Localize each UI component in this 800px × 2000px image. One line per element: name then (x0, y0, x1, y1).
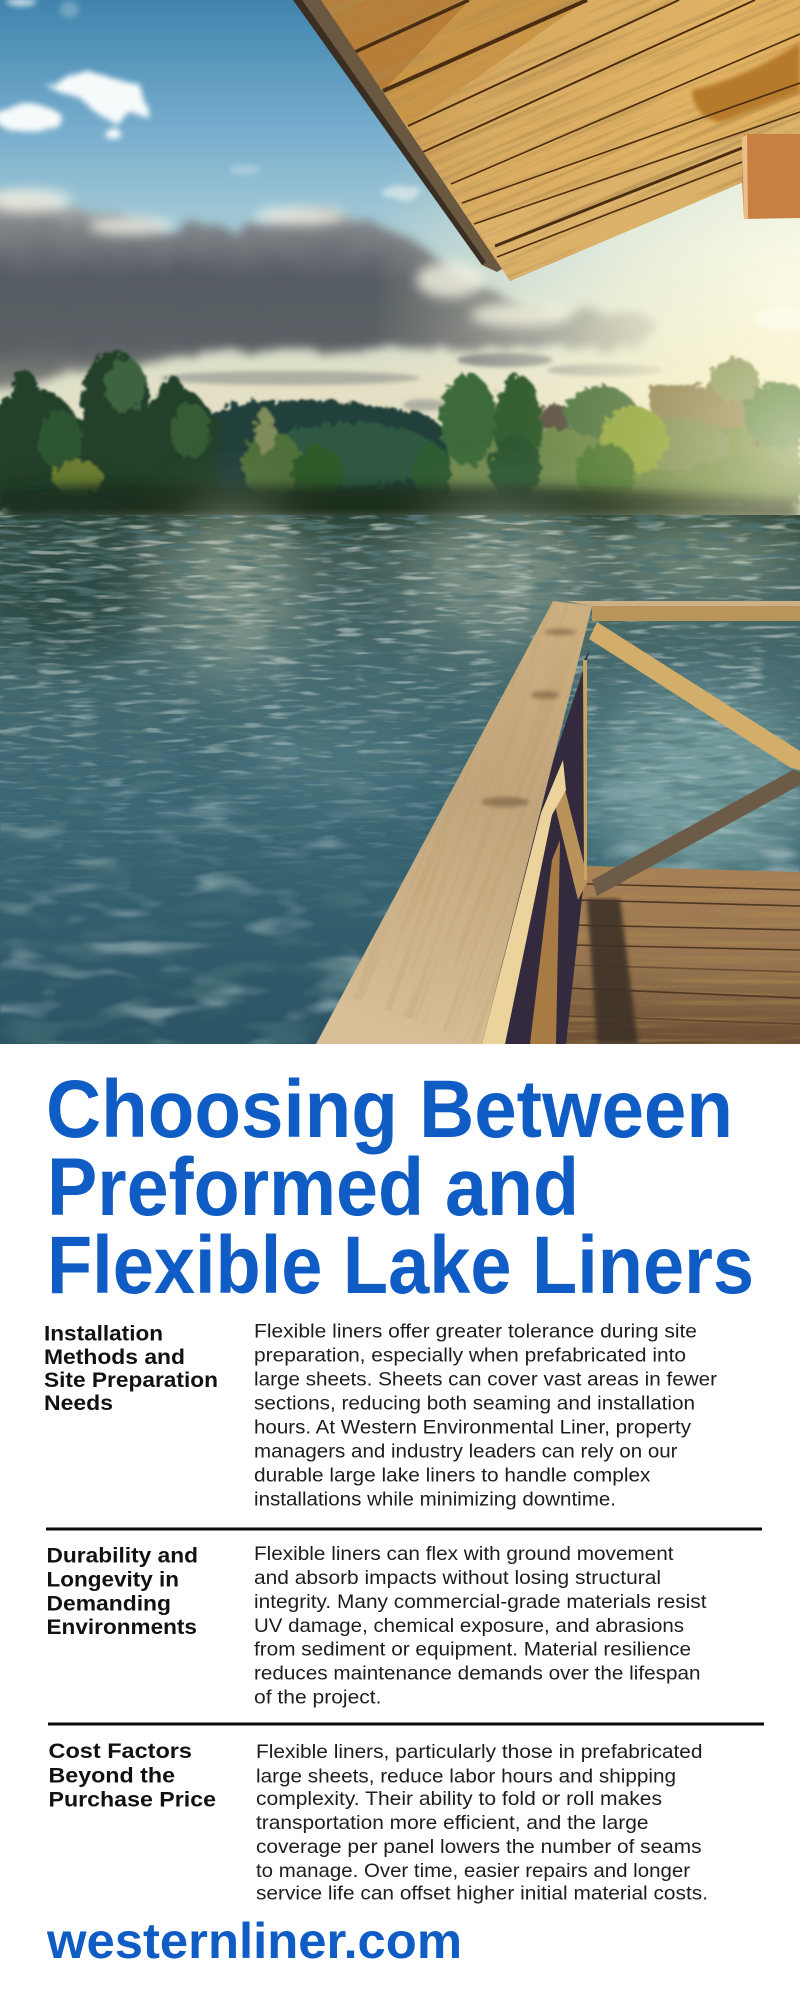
light diagonal brace (589, 622, 800, 770)
section body: sections, reducing both seaming and installation (254, 1392, 695, 1414)
handrail knots (481, 629, 576, 807)
handrail wood grain (354, 678, 562, 1042)
section body: reduces maintenance demands over the lifespan (254, 1662, 700, 1684)
centre trees (440, 374, 496, 466)
mid shrubs (242, 431, 302, 499)
large storm cloud (0, 188, 660, 390)
section heading: Beyond the (48, 1764, 175, 1788)
section heading (46, 1544, 198, 1639)
distant clouds (160, 353, 663, 411)
sky (0, 0, 800, 440)
title (46, 1064, 754, 1311)
section body: Flexible liners offer greater tolerance during site (254, 1320, 697, 1342)
tree line (0, 352, 800, 512)
top horizontal rail (566, 601, 800, 621)
section heading: Longevity in (46, 1568, 179, 1592)
section body: large sheets. Sheets can cover vast areas in fewer (254, 1368, 718, 1390)
left trees (0, 352, 220, 512)
shoreline (0, 485, 800, 522)
section body: installations while minimizing downtime. (254, 1488, 616, 1510)
roof planks (321, 0, 800, 281)
section body: coverage per panel lowers the number of seams (256, 1836, 702, 1858)
section body: Flexible liners can flex with ground movement (254, 1543, 674, 1565)
section body (254, 1543, 707, 1708)
sun glare (388, 172, 800, 410)
sunlit hillside (446, 424, 800, 506)
section heading: Durability and (46, 1544, 198, 1568)
water ripples (0, 515, 800, 1044)
section body: durable large lake liners to handle complex (254, 1464, 651, 1486)
section body: hours. At Western Environmental Liner, property (254, 1416, 691, 1438)
section heading: Installation (44, 1322, 163, 1346)
section body: integrity. Many commercial-grade materials resist (254, 1591, 707, 1613)
section heading: Environments (46, 1615, 197, 1639)
section heading: Demanding (46, 1592, 171, 1616)
section body: and absorb impacts without losing structural (254, 1567, 661, 1589)
cloud sunlit fringe (0, 189, 570, 327)
bright horizon band (56, 348, 358, 378)
title: Preformed and (47, 1142, 579, 1233)
deck shadow (587, 899, 638, 1044)
dock deck (560, 860, 800, 1050)
section heading: Cost Factors (48, 1739, 192, 1763)
section: cost factors (48, 1739, 708, 1904)
sunset haze over trees (551, 198, 800, 515)
water reflections (0, 500, 800, 890)
roof fascia edge (293, 0, 502, 272)
dark diagonal brace (592, 770, 800, 896)
section: installation methods (44, 1320, 718, 1510)
small white clouds (0, 0, 422, 200)
section body (254, 1320, 718, 1510)
section body: Flexible liners, particularly those in prefabricated (256, 1741, 702, 1763)
title: Choosing Between (46, 1064, 733, 1155)
section body (256, 1741, 708, 1904)
section heading: Needs (44, 1391, 113, 1415)
back forest (190, 400, 450, 500)
section body: transportation more efficient, and the large (256, 1812, 648, 1834)
section body: preparation, especially when prefabricated into (254, 1344, 686, 1366)
roof shadow patch (692, 42, 800, 122)
section body: from sediment or equipment. Material resilience (254, 1638, 691, 1660)
section body: UV damage, chemical exposure, and abrasions (254, 1615, 684, 1637)
section body: to manage. Over time, easier repairs and longer (256, 1860, 691, 1882)
roof wood grain (328, 0, 800, 281)
dark inner post area (470, 650, 590, 1044)
roof underside (130, 0, 800, 497)
roof plank joints (355, 0, 800, 257)
section: durability and longevity (46, 1543, 707, 1708)
sunlit bushes (600, 406, 668, 474)
roof beam end (742, 134, 800, 219)
section body: large sheets, reduce labor hours and shipping (256, 1766, 676, 1788)
photo: lake view from a wooden dock (0, 0, 800, 1056)
section body: complexity. Their ability to fold or roll makes (256, 1788, 662, 1810)
section heading: Purchase Price (48, 1788, 216, 1812)
water (0, 515, 800, 1044)
section heading: Site Preparation (44, 1368, 218, 1392)
section heading: Methods and (44, 1345, 185, 1369)
hillside buildings (542, 405, 570, 429)
white cloud right (755, 306, 800, 330)
handrail bright edge (482, 760, 566, 1044)
section heading (44, 1322, 218, 1415)
section body: managers and industry leaders can rely on our (254, 1440, 678, 1462)
section body: of the project. (254, 1686, 382, 1708)
railing (316, 601, 800, 1044)
section heading (48, 1739, 216, 1812)
section body: service life can offset higher initial material costs. (256, 1882, 708, 1904)
website url: westernliner.com (46, 1913, 462, 1969)
main handrail (316, 601, 592, 1044)
